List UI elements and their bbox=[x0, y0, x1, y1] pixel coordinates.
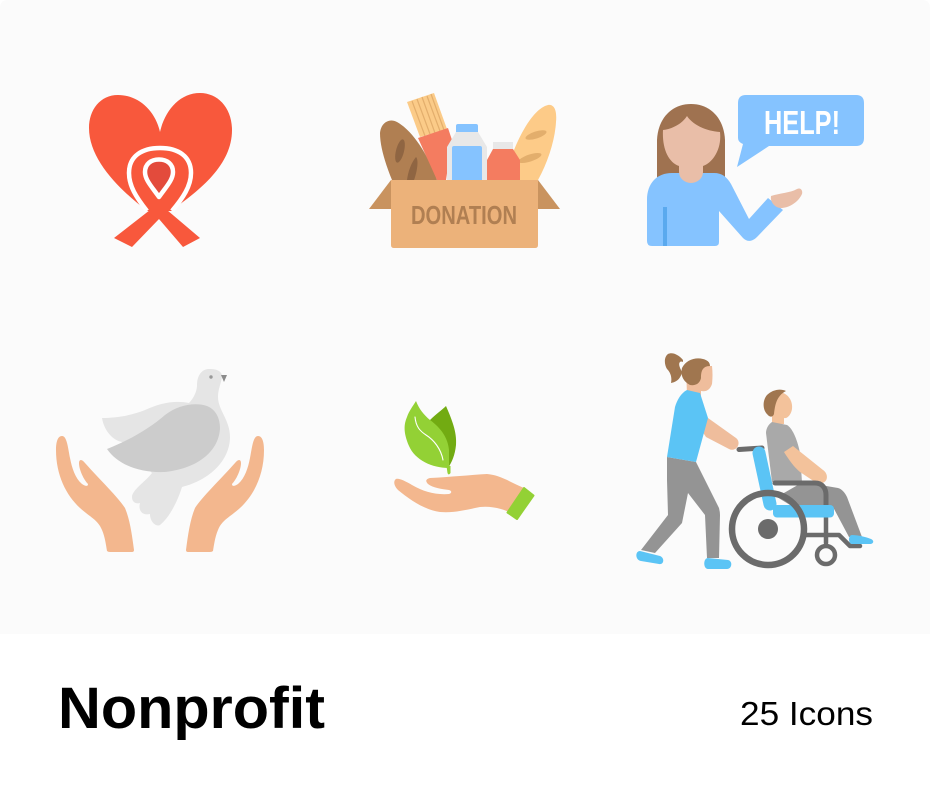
woman pants bbox=[641, 457, 720, 558]
hair bbox=[657, 104, 725, 180]
icon: heart with ribbon bbox=[89, 93, 232, 247]
face and neck bbox=[663, 116, 720, 183]
man legs bbox=[777, 482, 862, 537]
right hand bbox=[186, 436, 264, 552]
hand bbox=[394, 474, 524, 512]
front leaf bbox=[405, 401, 449, 468]
jar bbox=[487, 142, 520, 180]
woman shoes bbox=[636, 551, 731, 569]
icon count: 25 Icons bbox=[740, 695, 873, 732]
woman face bbox=[686, 366, 712, 396]
man arm bbox=[784, 446, 827, 483]
woman hair bbox=[681, 358, 710, 385]
wheelchair frame bbox=[739, 448, 860, 546]
right bread bbox=[512, 105, 556, 180]
icon: dove and hands bbox=[56, 369, 264, 552]
dove eye bbox=[209, 375, 213, 379]
small wheel bbox=[817, 546, 835, 564]
man face bbox=[772, 393, 792, 424]
man hair bbox=[764, 390, 786, 417]
woman shirt bbox=[667, 390, 708, 462]
vein bbox=[415, 417, 443, 460]
dove wing bbox=[107, 404, 220, 472]
pasta packet bbox=[407, 93, 452, 180]
icon: donation box bbox=[369, 93, 560, 248]
man shoe bbox=[849, 535, 873, 544]
hand bbox=[771, 188, 802, 208]
box front bbox=[391, 180, 538, 248]
cuff bbox=[508, 488, 534, 519]
man shirt bbox=[766, 422, 802, 482]
icon: person pushing wheelchair bbox=[636, 353, 873, 569]
bubble text: HELP! bbox=[764, 104, 840, 141]
torso and arm bbox=[647, 173, 783, 246]
woman arm bbox=[698, 418, 739, 450]
left bread bbox=[380, 120, 437, 180]
woman ponytail bbox=[665, 353, 683, 383]
milk bottle bbox=[447, 124, 487, 180]
box flaps bbox=[369, 180, 560, 209]
left hand bbox=[56, 436, 134, 552]
title: Nonprofit bbox=[58, 676, 325, 741]
back leaf bbox=[430, 406, 456, 468]
dove body bbox=[102, 369, 230, 525]
speech bubble bbox=[737, 95, 864, 167]
stem bbox=[446, 466, 450, 474]
icon: leaves on open hand bbox=[394, 401, 534, 519]
large wheel bbox=[732, 493, 804, 565]
box label: DONATION bbox=[411, 200, 517, 230]
wheelchair back and seat bbox=[759, 453, 834, 518]
icon: woman asking for help bbox=[647, 95, 864, 246]
dove beak bbox=[221, 375, 227, 382]
